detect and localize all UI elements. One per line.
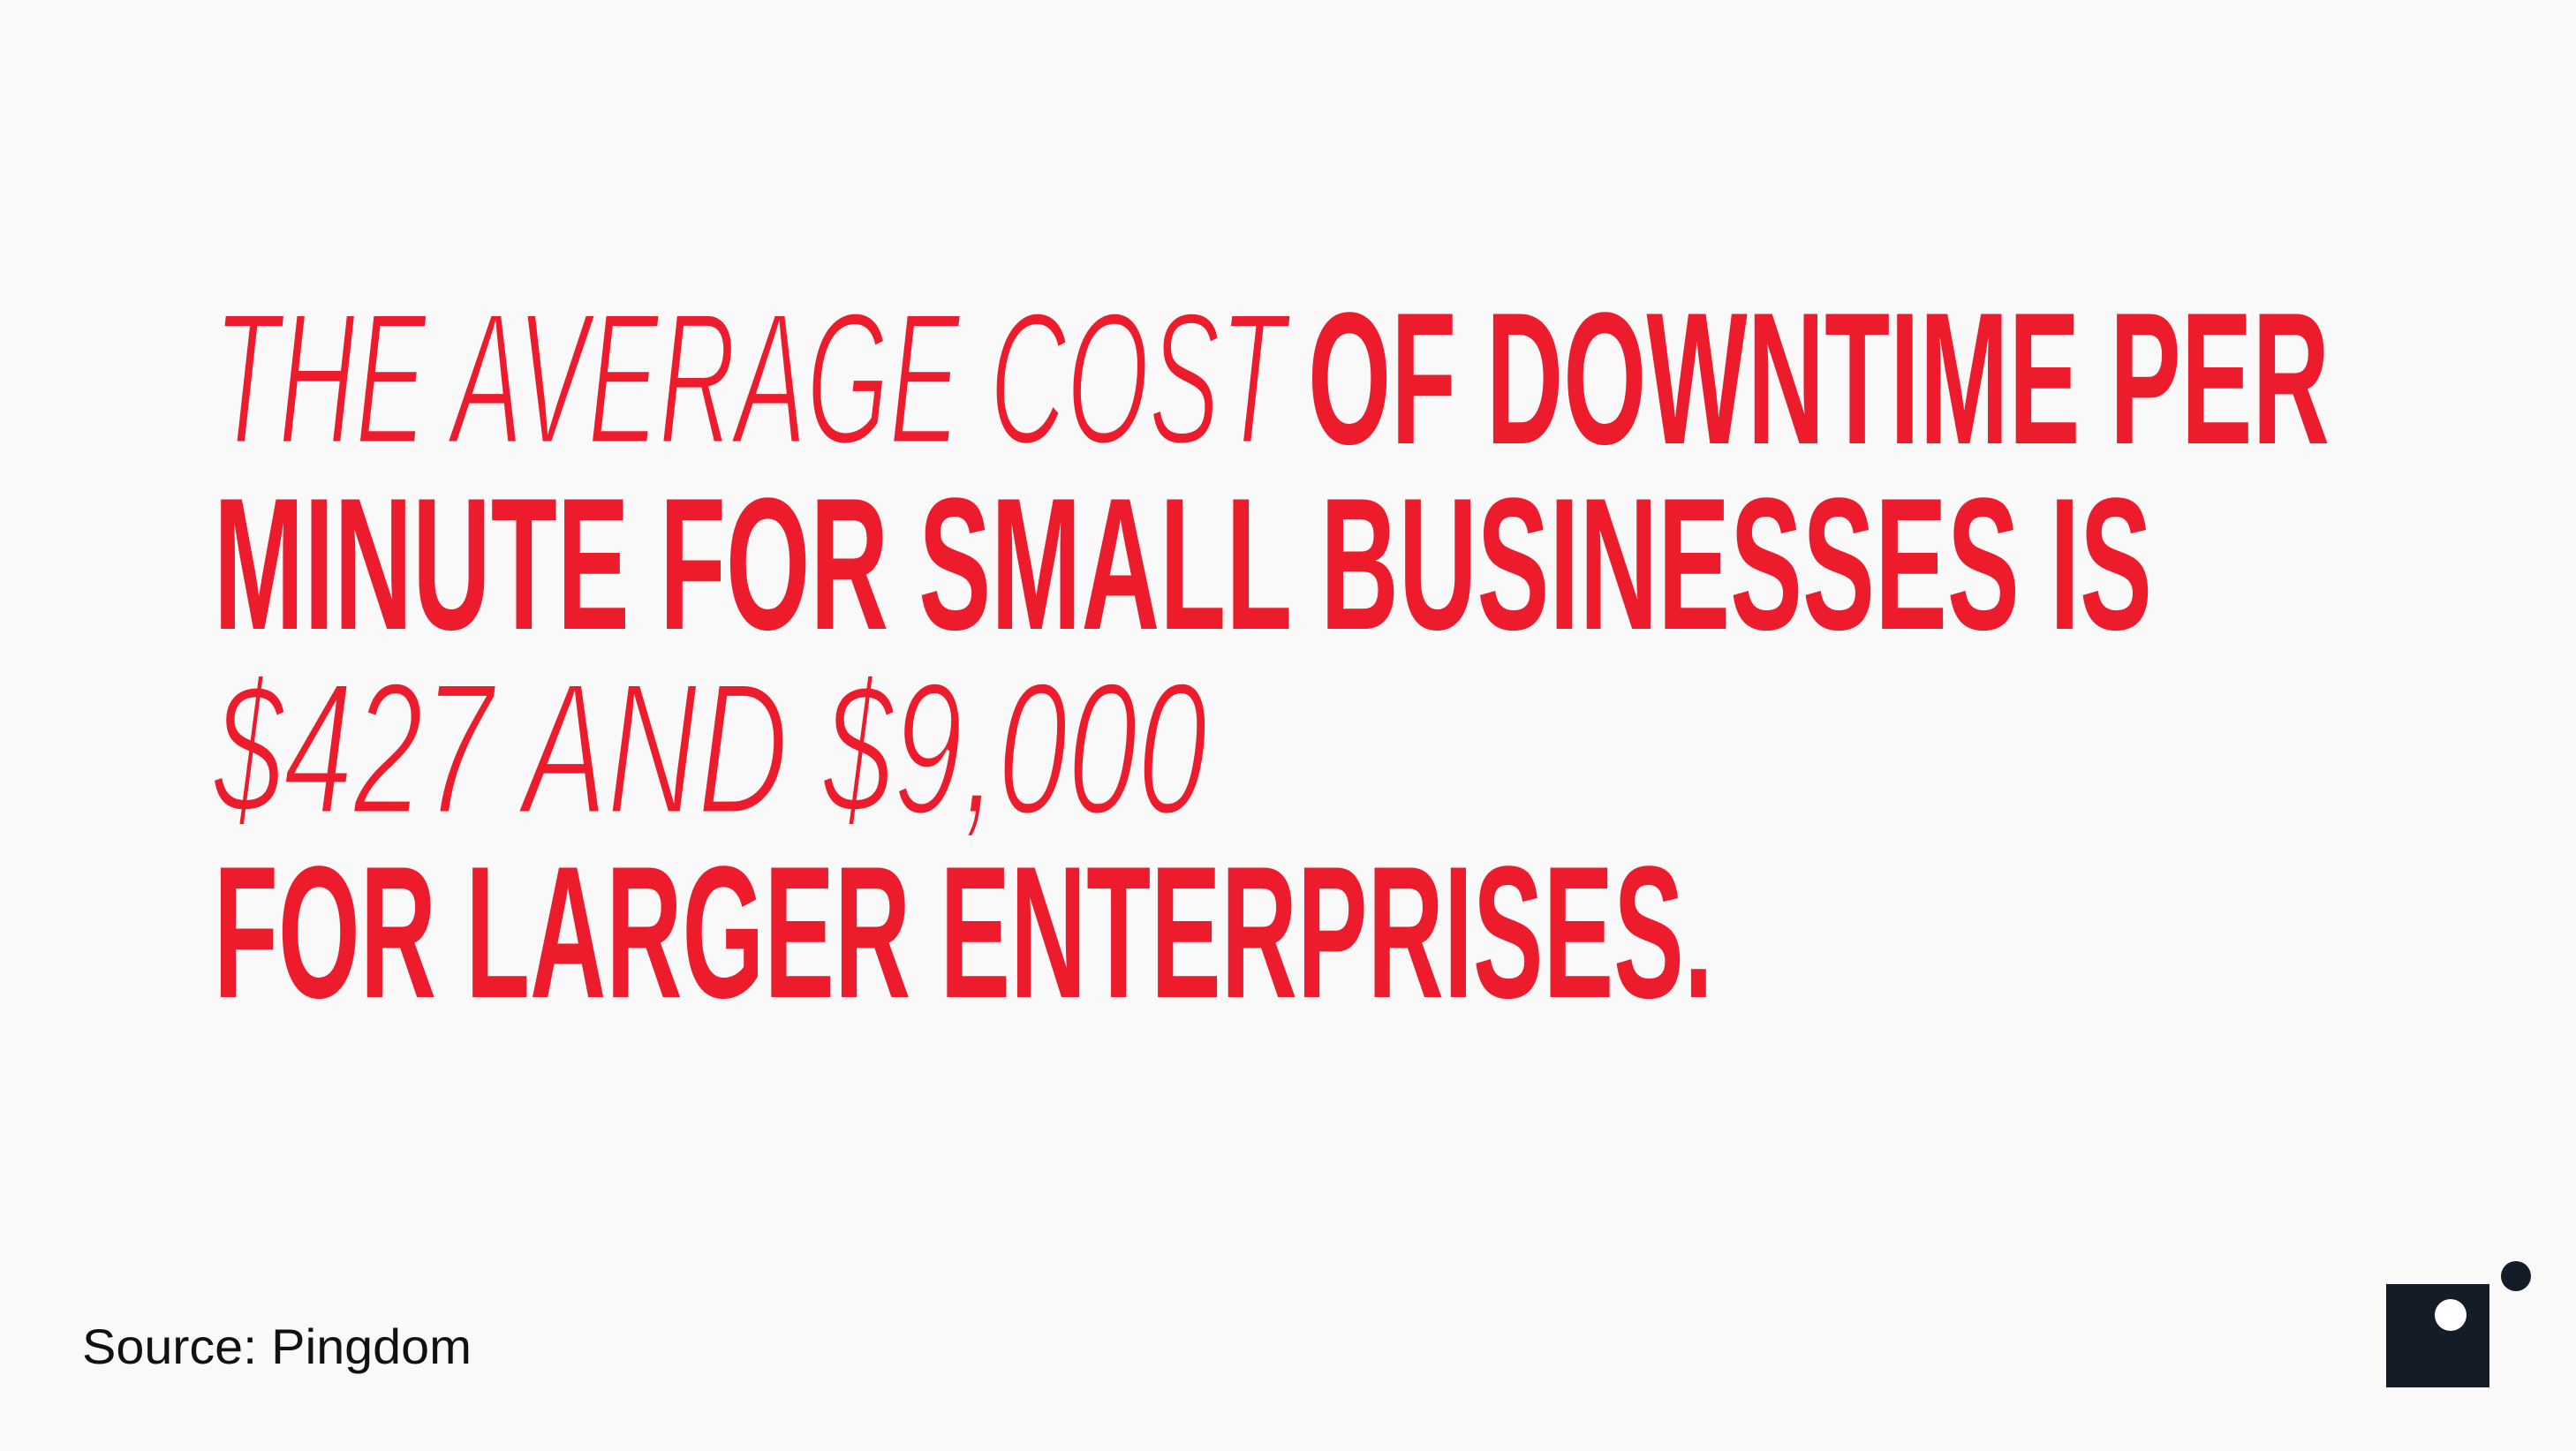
logo xyxy=(2386,1261,2531,1387)
line 1 italic part: THE AVERAGE COST xyxy=(214,274,1291,484)
headline xyxy=(213,274,2330,1038)
source note: Source: Pingdom xyxy=(82,1319,472,1374)
line 3 amounts: $427 AND $9,000 xyxy=(213,644,1207,854)
